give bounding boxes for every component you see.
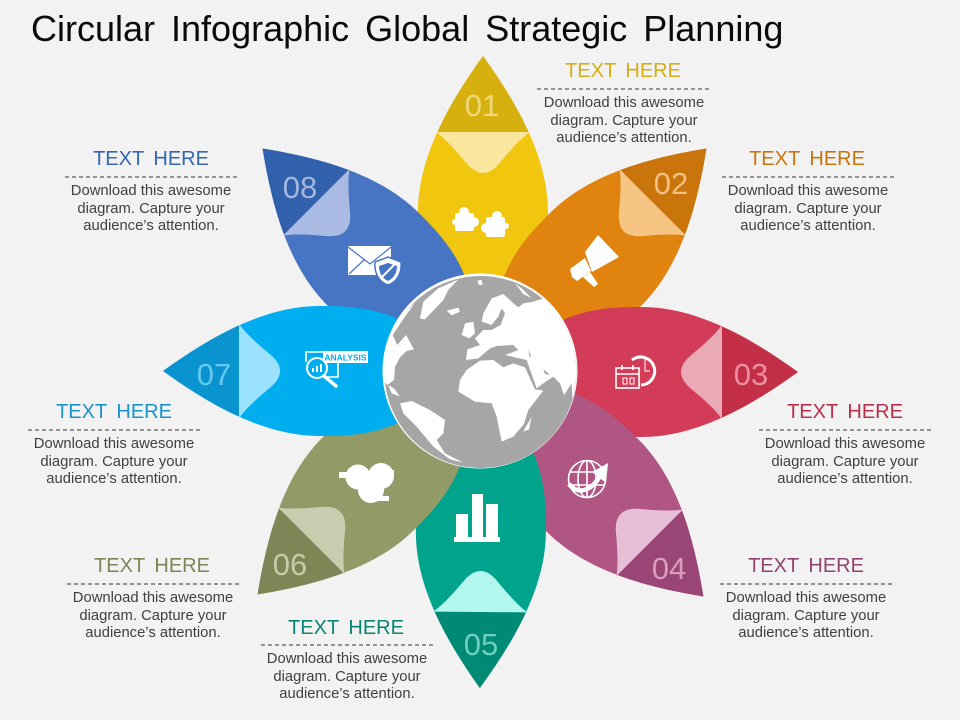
icon: globe with arrow [568, 460, 608, 498]
body 05: audience’s attention. [279, 686, 415, 702]
text block 01 [537, 60, 711, 146]
petal shape 05 [416, 452, 546, 688]
heading 01: TEXT HERE [565, 60, 681, 82]
petal shape 07 [163, 306, 398, 436]
heading 06: TEXT HERE [94, 555, 210, 577]
body 03: Download this awesome [765, 436, 925, 452]
petal 01 [418, 56, 548, 276]
petal shape 02 [504, 148, 706, 320]
body 03: diagram. Capture your [771, 454, 919, 470]
number 08: 08 [283, 170, 317, 205]
icon: megaphone [570, 235, 619, 287]
body 07: audience’s attention. [46, 471, 182, 487]
heading 05: TEXT HERE [288, 617, 404, 639]
petal shape 08 [262, 148, 464, 319]
number 06: 06 [273, 547, 307, 582]
body 06: Download this awesome [73, 590, 233, 606]
body 01: audience’s attention. [556, 130, 692, 146]
body 07: diagram. Capture your [40, 454, 188, 470]
petal 03 [563, 307, 798, 437]
globe rim [382, 274, 578, 468]
petal shape 01 [418, 56, 548, 276]
petal 05 [416, 452, 546, 688]
body 06: audience’s attention. [85, 625, 221, 641]
body 02: Download this awesome [728, 183, 888, 199]
globe continents [380, 279, 587, 463]
body 01: diagram. Capture your [550, 113, 698, 129]
icon: analysis magnifier: ANALYSIS [324, 352, 367, 362]
heading 07: TEXT HERE [56, 401, 172, 423]
heading 03: TEXT HERE [787, 401, 903, 423]
body 08: Download this awesome [71, 183, 231, 199]
body 08: diagram. Capture your [77, 201, 225, 217]
text block 02 [722, 148, 895, 234]
body 02: audience’s attention. [740, 218, 876, 234]
petal 07 [163, 306, 398, 436]
number 07: 07 [197, 357, 231, 392]
heading 02: TEXT HERE [749, 148, 865, 170]
icon: cloud [339, 463, 394, 503]
body 01: Download this awesome [544, 95, 704, 111]
heading 04: TEXT HERE [748, 555, 864, 577]
number 02: 02 [654, 166, 688, 201]
icon: calendar and clock [616, 357, 655, 388]
body 04: diagram. Capture your [732, 608, 880, 624]
text block 03 [759, 401, 932, 487]
petal 04 [533, 394, 704, 596]
icon: analysis magnifier [306, 351, 368, 386]
body 06: diagram. Capture your [79, 608, 227, 624]
heading 08: TEXT HERE [93, 148, 209, 170]
petal shape 04 [533, 394, 704, 596]
number 03: 03 [734, 357, 768, 392]
number 05: 05 [464, 627, 498, 662]
body 05: diagram. Capture your [273, 669, 421, 685]
body 02: diagram. Capture your [734, 201, 882, 217]
icon: envelope and shield [348, 246, 401, 285]
petal 06 [258, 423, 460, 594]
text block 07 [28, 401, 201, 487]
body 05: Download this awesome [267, 651, 427, 667]
number 04: 04 [652, 551, 686, 586]
petal shape 03 [563, 307, 798, 437]
title: Circular Infographic Global Strategic Planning [31, 8, 783, 49]
petal 02 [504, 148, 706, 320]
body 04: Download this awesome [726, 590, 886, 606]
text block 05 [261, 617, 434, 702]
body 07: Download this awesome [34, 436, 194, 452]
body 04: audience’s attention. [738, 625, 874, 641]
body 03: audience’s attention. [777, 471, 913, 487]
icon: bar chart [454, 494, 500, 542]
globe sphere [384, 276, 576, 468]
text block 06 [67, 555, 240, 641]
petal 08 [262, 148, 464, 319]
body 08: audience’s attention. [83, 218, 219, 234]
text block 04 [720, 555, 893, 641]
globe [380, 274, 587, 468]
number 01: 01 [465, 88, 499, 123]
petal shape 06 [258, 423, 460, 594]
icon: puzzle pieces [452, 207, 509, 237]
text block 08 [65, 148, 238, 234]
